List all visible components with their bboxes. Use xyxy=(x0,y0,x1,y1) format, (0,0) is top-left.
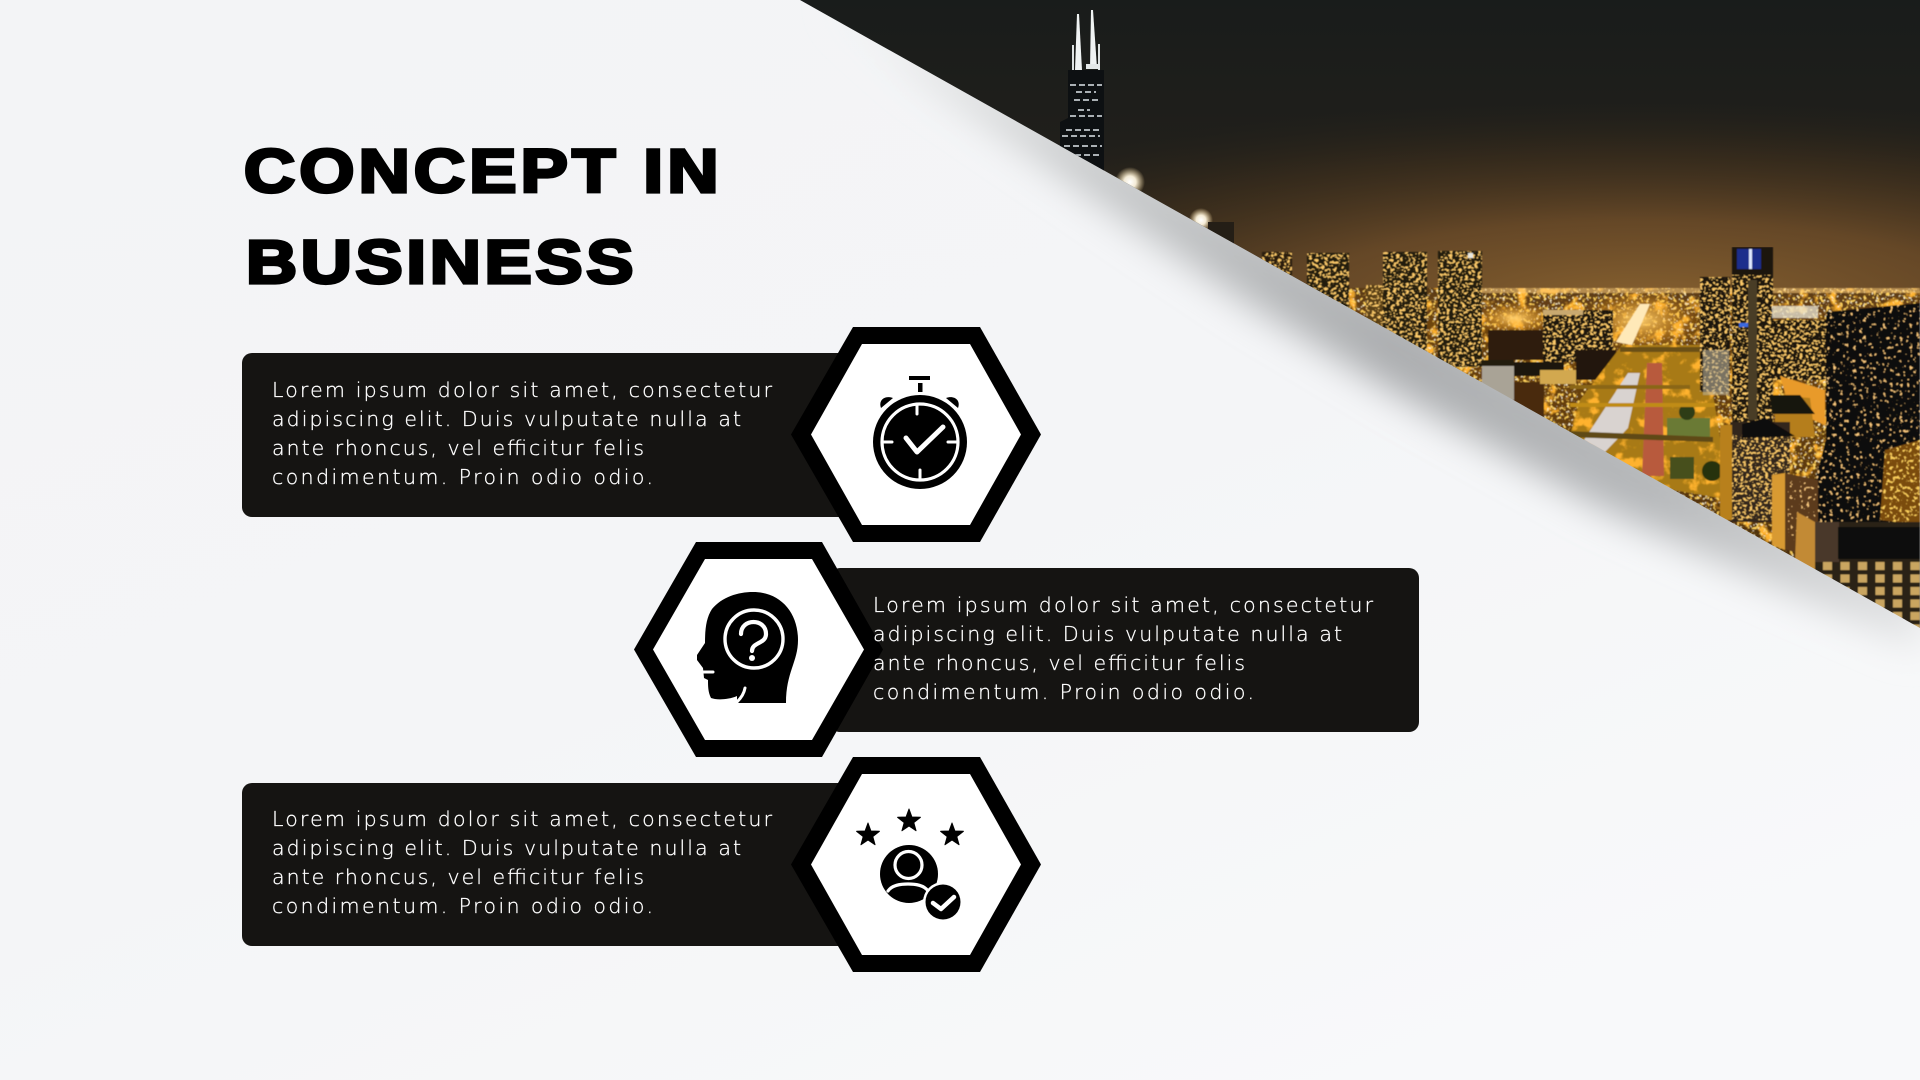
brick building with lit windows xyxy=(1795,512,1920,635)
night sky xyxy=(800,0,1920,300)
right-hand dark buildings xyxy=(1720,303,1920,560)
text block 2: adipiscing elit. Duis vulputate nulla at xyxy=(873,622,1342,646)
row 2 xyxy=(634,542,1419,757)
apartment towers xyxy=(1262,251,1482,372)
text block 1: ante rhoncus, vel efficitur felis xyxy=(272,436,644,460)
text block 1: condimentum. Proin odio odio. xyxy=(272,465,653,489)
text block 1: adipiscing elit. Duis vulputate nulla at xyxy=(272,407,741,431)
towers with blue crown xyxy=(1700,247,1773,422)
panel 3 xyxy=(242,783,882,946)
text block 3: ante rhoncus, vel efficitur felis xyxy=(272,865,644,889)
text block 1 xyxy=(272,378,773,489)
icon: head with question mark xyxy=(697,592,798,703)
text block 3 xyxy=(272,807,773,918)
row 1 xyxy=(242,327,1041,542)
icon: rated user with check badge xyxy=(857,809,963,922)
distant bright lights xyxy=(1116,168,1234,244)
panel 2 xyxy=(830,568,1419,732)
text block 2 xyxy=(873,593,1374,704)
highway with light trails xyxy=(1568,303,1721,498)
panel 1 xyxy=(242,353,882,517)
infographic canvas xyxy=(242,0,1920,972)
hexagon 3 xyxy=(791,757,1041,972)
city photo xyxy=(800,0,1920,635)
title: CONCEPT IN xyxy=(244,137,718,205)
city base and lights xyxy=(1348,287,1920,558)
text block 2: condimentum. Proin odio odio. xyxy=(873,680,1254,704)
text block 3: Lorem ipsum dolor sit amet, consectetur xyxy=(272,807,773,831)
row 3 xyxy=(242,757,1041,972)
text block 2: Lorem ipsum dolor sit amet, consectetur xyxy=(873,593,1374,617)
mid-ground dark blocks xyxy=(1482,310,1616,427)
text block 3: adipiscing elit. Duis vulputate nulla at xyxy=(272,836,741,860)
hexagon 2 xyxy=(634,542,883,757)
skyscraper with spires xyxy=(1060,10,1104,170)
title line 2: BUSINESS xyxy=(246,228,633,296)
text block 1: Lorem ipsum dolor sit amet, consectetur xyxy=(272,378,773,402)
hexagon 1 xyxy=(791,327,1041,542)
diagonal shadow under photo xyxy=(830,0,1920,650)
icon: stopwatch xyxy=(873,376,967,489)
text block 2: ante rhoncus, vel efficitur felis xyxy=(873,651,1245,675)
text block 3: condimentum. Proin odio odio. xyxy=(272,894,653,918)
